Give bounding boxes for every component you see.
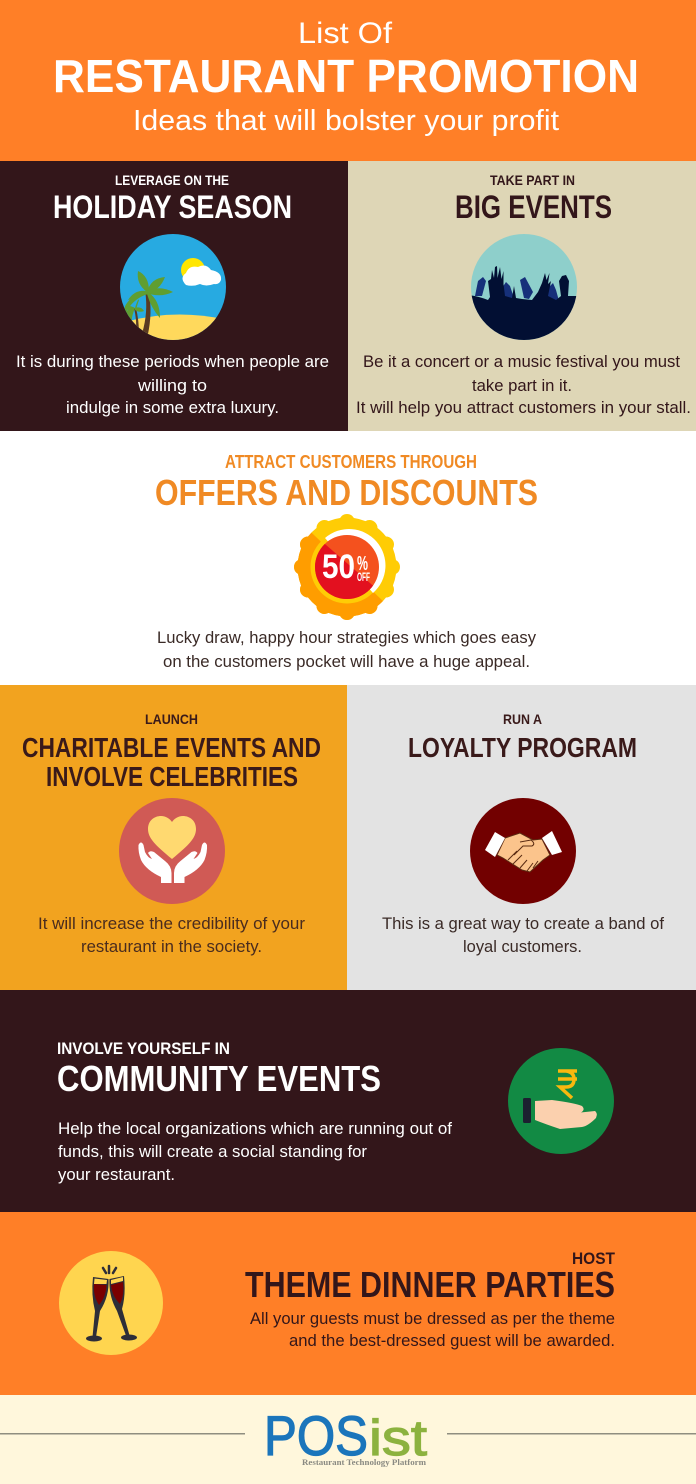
heading: theme dinner parties: [245, 1249, 616, 1305]
icon: 50% off badge: 50: [322, 548, 355, 586]
heading: big events: [455, 172, 612, 225]
body text: on the customers pocket will have a huge appeal.: [163, 652, 530, 671]
body text: This is a great way to create a band of: [382, 914, 664, 933]
body text: Lucky draw, happy hour strategies which goes easy: [157, 628, 536, 647]
heading: community events: INVOLVE YOURSELF IN: [57, 1039, 230, 1058]
body text: It will increase the credibility of your: [38, 914, 305, 933]
heading: charitable events: INVOLVE CELEBRITIES: [46, 761, 298, 792]
icon: concert crowd: [468, 234, 580, 342]
title line: List Of: List Of: [298, 17, 393, 50]
heading: loyalty program: LOYALTY PROGRAM: [408, 732, 637, 763]
icon: 50% off badge: %: [357, 553, 368, 575]
heading: charitable events: [22, 711, 321, 792]
icon: handshake: [470, 798, 576, 904]
panel: offers and discounts: [156, 455, 537, 670]
body text: restaurant in the society.: [81, 937, 262, 956]
icon: hand with rupee: [508, 1048, 614, 1154]
body text: willing to: [137, 376, 207, 395]
body text: indulge in some extra luxury.: [66, 398, 279, 417]
body text: [16, 352, 329, 417]
icon: beach with palm tree: [118, 234, 228, 342]
icon: 50% off badge: [294, 514, 400, 620]
body text: [356, 352, 691, 417]
body text: [38, 914, 305, 956]
heading: holiday season: [53, 172, 292, 225]
body text: It is during these periods when people are: [16, 352, 329, 371]
panel: big events: [348, 161, 696, 431]
heading: theme dinner parties: THEME DINNER PARTIES: [245, 1264, 615, 1305]
body text: It will help you attract customers in your stall.: [356, 398, 691, 417]
body text: Be it a concert or a music festival you must: [363, 352, 680, 371]
title: Restaurant Promotion: RESTAURANT PROMOTION: [53, 50, 639, 102]
icon: 50% off badge: OFF: [357, 570, 370, 584]
body text: Help the local organizations which are running out of: [58, 1119, 452, 1138]
body text: [382, 914, 664, 956]
body text: [157, 628, 536, 671]
icon: champagne glasses: [59, 1251, 163, 1355]
panel: charitable events: [0, 685, 347, 990]
body text: [58, 1119, 452, 1184]
panel: theme dinner parties: [0, 1212, 696, 1395]
heading: offers and discounts: ATTRACT CUSTOMERS THROUGH: [225, 452, 477, 472]
heading: offers and discounts: [155, 452, 538, 513]
panel: loyalty program: [347, 685, 696, 990]
body text: your restaurant.: [58, 1165, 175, 1184]
body text: funds, this will create a social standing for: [58, 1142, 367, 1161]
heading: community events: COMMUNITY EVENTS: [57, 1058, 381, 1099]
icon: hands holding heart: [119, 798, 225, 904]
panel: holiday season: [0, 161, 348, 431]
heading: loyalty program: RUN A: [503, 711, 542, 727]
heading: loyalty program: [408, 711, 637, 763]
heading: big events: BIG EVENTS: [455, 189, 612, 225]
heading: theme dinner parties: HOST: [572, 1249, 616, 1268]
logo: POSist: POS: [264, 1404, 368, 1467]
heading: holiday season: HOLIDAY SEASON: [53, 189, 292, 225]
logo: POSist: ist: [369, 1410, 427, 1466]
panel: community events: [0, 990, 696, 1212]
body text: and the best-dressed guest will be awarded.: [289, 1331, 615, 1350]
body text: loyal customers.: [463, 937, 582, 956]
heading: holiday season: LEVERAGE ON THE: [115, 172, 229, 188]
heading: charitable events: LAUNCH: [145, 711, 198, 727]
heading: big events: TAKE PART IN: [490, 172, 575, 188]
body text: [250, 1309, 615, 1350]
heading: community events: [57, 1039, 381, 1099]
logo: POSist: Restaurant Technology Platform: [302, 1457, 426, 1467]
heading: charitable events: CHARITABLE EVENTS AND: [22, 732, 321, 763]
body text: All your guests must be dressed as per the theme: [250, 1309, 615, 1328]
body text: take part in it.: [472, 376, 572, 395]
panel: footer: [0, 1395, 696, 1484]
subtitle: Ideas that will bolster your profit: [133, 105, 559, 137]
panel: header: [0, 0, 696, 161]
heading: offers and discounts: OFFERS AND DISCOUNTS: [155, 472, 538, 513]
